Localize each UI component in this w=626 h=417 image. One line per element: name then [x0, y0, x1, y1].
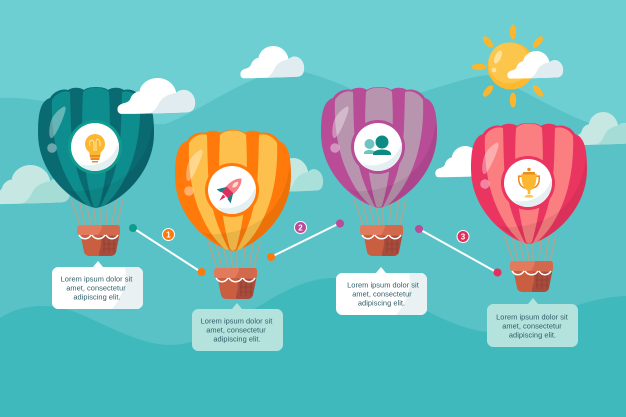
cloud: white over teal balloon	[117, 78, 195, 114]
sun rays	[472, 24, 545, 108]
connector 1	[129, 224, 206, 276]
balloon 1: teal	[38, 87, 154, 256]
cloud: left pale	[0, 165, 70, 204]
callout 1	[52, 261, 143, 309]
cloud: white behind red balloon	[435, 146, 493, 177]
cloud: over sun	[507, 51, 563, 79]
callout 4: amet, consectetur	[502, 322, 562, 330]
callout 2: Lorem ipsum dolor sit	[201, 316, 272, 326]
step number 1: 1	[166, 230, 171, 239]
step number 2: 2	[298, 223, 303, 232]
callout 2: amet, consectetur	[206, 326, 266, 334]
callout 1: adipiscing elit.	[73, 292, 121, 302]
connector 3	[415, 225, 502, 276]
cloud: right pale	[571, 112, 626, 145]
balloon 4: red	[471, 123, 587, 292]
callout 2: adipiscing elit.	[213, 334, 261, 344]
callout 2	[192, 303, 283, 351]
icon: people	[364, 136, 391, 155]
balloon 3: purple	[321, 87, 437, 256]
connector 2	[267, 220, 344, 261]
icon: rocket	[212, 172, 248, 208]
callout 3: Lorem ipsum dolor sit	[347, 280, 419, 290]
callout 4: Lorem ipsum dolor sit	[496, 312, 568, 322]
icon: light bulb	[85, 134, 105, 162]
callout 3: adipiscing elit.	[358, 298, 405, 308]
callout 3	[336, 267, 427, 315]
cloud: top centre	[240, 46, 304, 78]
callout 3: amet, consectetur	[352, 290, 412, 298]
callout 1: amet, consectetur	[66, 284, 126, 292]
callout 4: adipiscing elit.	[509, 330, 556, 340]
callout 1: Lorem ipsum dolor sit	[61, 274, 132, 284]
background foreground hills	[0, 278, 626, 417]
icon: trophy	[519, 168, 539, 197]
cloud: behind orange balloon	[261, 158, 323, 192]
balloon 2: orange	[175, 130, 291, 299]
step number 3: 3	[461, 232, 466, 241]
sun	[472, 24, 545, 108]
callout 4	[487, 298, 578, 347]
